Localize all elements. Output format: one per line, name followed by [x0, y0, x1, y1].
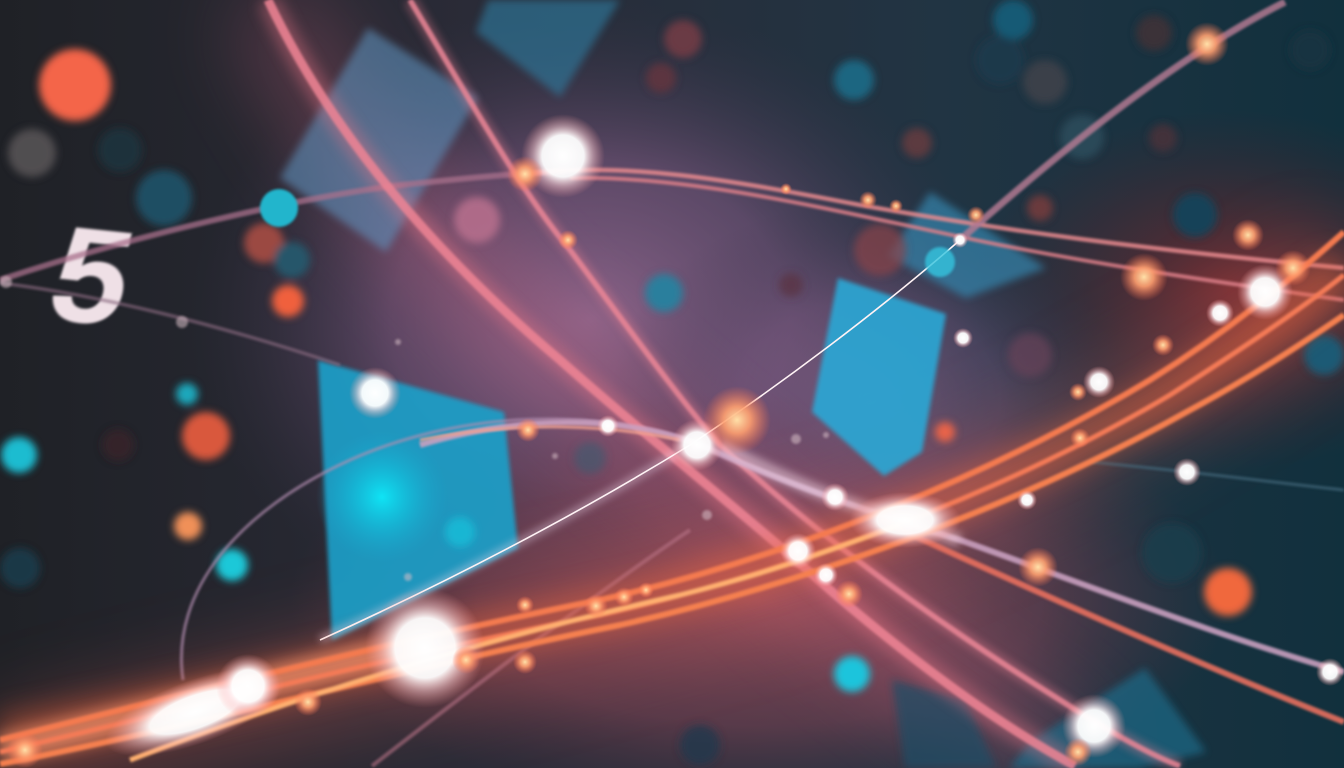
digit 5: 5 — [36, 197, 148, 354]
cyan nodes — [260, 189, 955, 277]
panel: right diamond — [888, 192, 1046, 298]
panel: top — [476, 0, 620, 97]
cyan hot spot — [316, 431, 448, 563]
panel: bottom right — [1010, 668, 1206, 768]
arc to the right — [420, 422, 1344, 722]
thin white line — [320, 240, 960, 640]
small specks — [0, 276, 829, 581]
glow under white line — [320, 445, 690, 640]
faint left lines — [0, 172, 1344, 680]
glowing white nodes — [95, 114, 1344, 768]
panel: large cyan — [318, 360, 518, 640]
thick pink strands from the top — [268, 0, 1180, 766]
panel: center right — [812, 278, 946, 476]
orange band of strands — [0, 232, 1344, 764]
translucent blue panels — [280, 0, 1206, 768]
orange band glow — [0, 270, 1344, 750]
upper right curves — [520, 2, 1344, 300]
panel: top left — [280, 28, 478, 252]
panel: bottom center — [892, 680, 996, 768]
